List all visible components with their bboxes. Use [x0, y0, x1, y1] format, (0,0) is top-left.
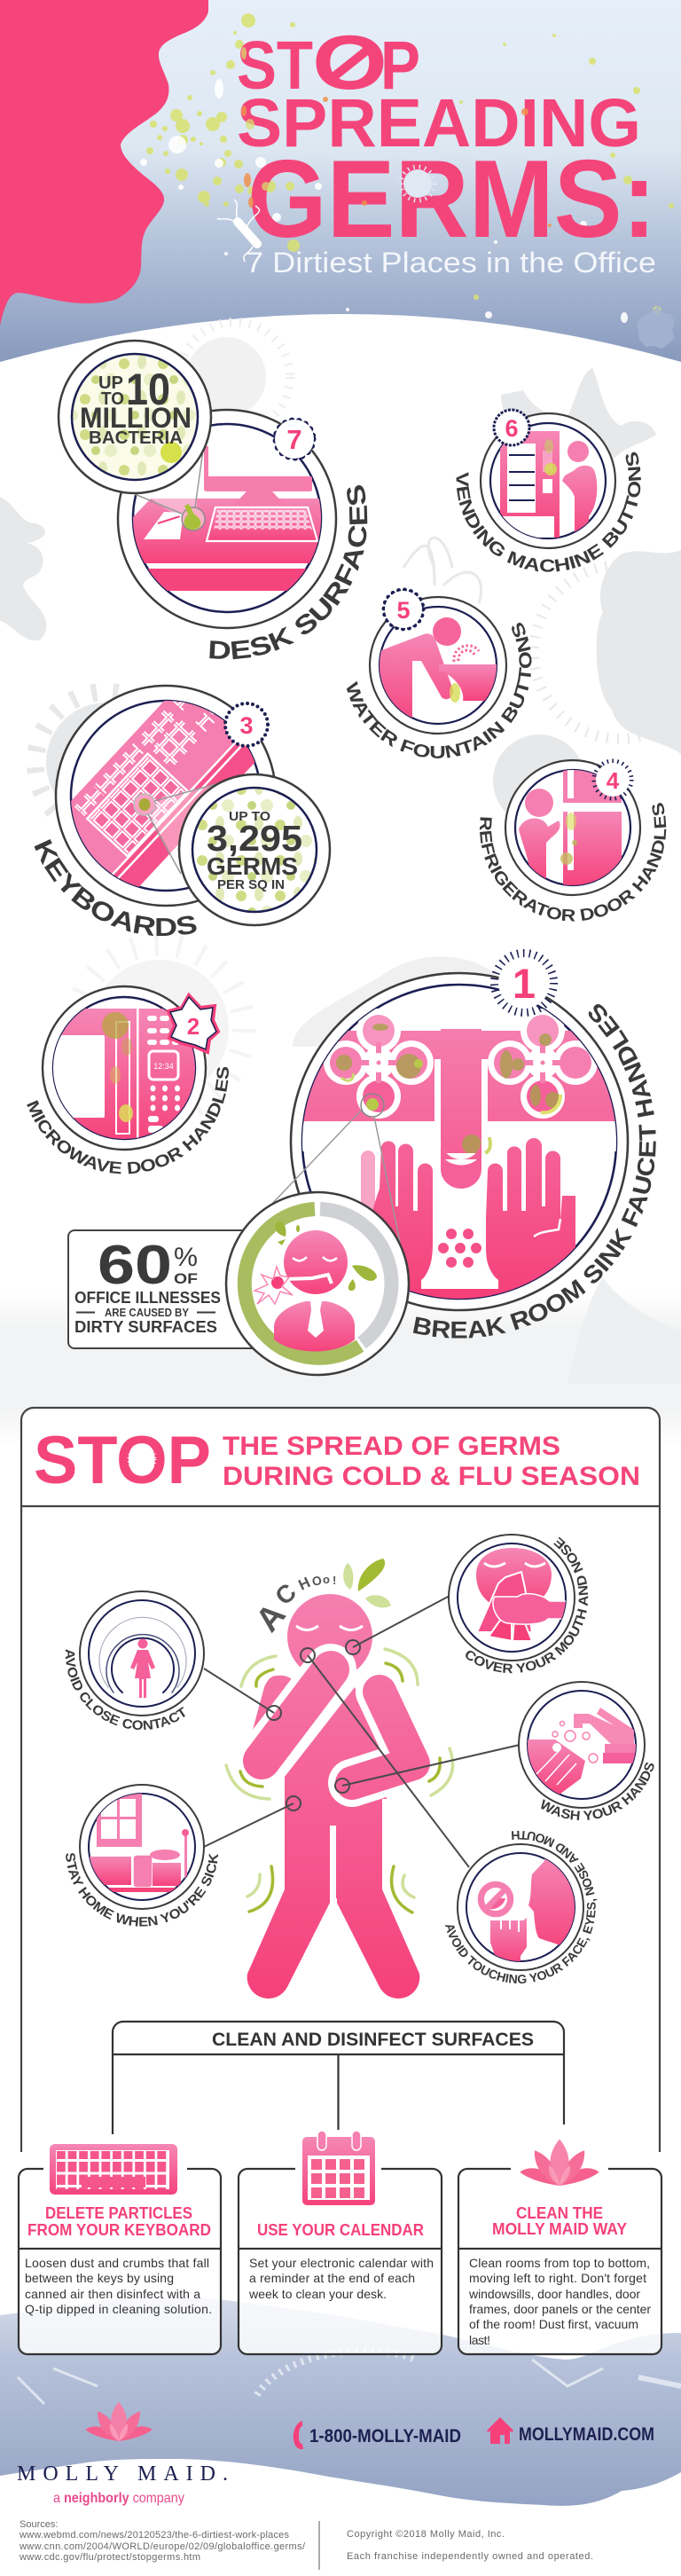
green drops — [352, 1265, 377, 1281]
eyes — [296, 1626, 363, 1630]
clean and disinfect bracket: CLEAN AND DISINFECT SURFACES — [212, 2030, 534, 2050]
badge 3 — [225, 703, 268, 746]
card: delete particles from your keyboard: Loosen dust and crumbs that fall — [25, 2256, 209, 2270]
bottom band and wrist — [410, 1289, 514, 1299]
icon: keyboard — [50, 2144, 177, 2195]
callout: 10 million bacteria: TO — [101, 389, 124, 409]
sources — [19, 2519, 306, 2563]
ring chart 60/40 — [245, 1209, 391, 1358]
icon: calendar — [302, 2131, 375, 2205]
sources: www.cnn.com/2004/WORLD/europe/02/09/globaloffice.germs/ — [19, 2541, 306, 2552]
title line: STOP: O — [312, 20, 387, 106]
sick face — [284, 1230, 348, 1294]
badge 7 — [275, 420, 314, 459]
card: clean the molly maid way: windowsills, door handles, door — [468, 2287, 640, 2301]
tip: avoid close contact: AVOID CLOSE CONTACT — [66, 1649, 185, 1730]
card: clean the molly maid way: MOLLY MAID WAY — [492, 2220, 627, 2238]
label: BREAK ROOM SINK FAUCET HANDLES — [413, 1004, 656, 1338]
bacterium — [217, 200, 260, 262]
stat box: 60 percent: ARE CAUSED BY — [105, 1307, 190, 1319]
card: clean the molly maid way: Clean rooms from top to bottom, — [469, 2256, 650, 2270]
stat box: 60 percent: OF — [174, 1270, 198, 1287]
tip: wash your hands: WASH YOUR HANDS — [541, 1762, 654, 1820]
callout: 3,295 germs: PER SQ IN — [217, 877, 285, 892]
drain holes — [438, 1229, 481, 1268]
panel heading: STOP — [34, 1423, 211, 1498]
card: use your calendar: Set your electronic calendar with — [249, 2256, 434, 2270]
badge 6: 6 — [505, 415, 519, 442]
title line: STOP: ST — [237, 27, 313, 104]
tip: cover your mouth and nose: COVER YOUR MOUTH AND NOSE — [466, 1536, 589, 1673]
pale background germs — [0, 322, 681, 1446]
stat box: 60 percent: OFFICE ILLNESSES — [74, 1289, 221, 1307]
card: use your calendar: USE YOUR CALENDAR — [257, 2221, 424, 2239]
title line: STOP: P — [380, 27, 420, 104]
copyright: Each franchise independently owned and operated. — [347, 2551, 593, 2562]
stat box: 60 percent — [68, 1230, 272, 1348]
wave germ decoration — [18, 2351, 681, 2404]
footer logo: lotus — [85, 2402, 153, 2441]
card: clean the molly maid way: frames, door panels or the center — [469, 2302, 651, 2316]
item 7: desk surfaces — [57, 339, 367, 660]
badge 2: 2 — [187, 1013, 200, 1040]
bottom wave background — [0, 2297, 681, 2506]
section: stop the spread panel — [21, 1408, 660, 2152]
callout: 10 million bacteria: MILLION — [80, 402, 192, 434]
card: delete particles from your keyboard: FROM YOUR KEYBOARD — [27, 2221, 211, 2239]
icon: house — [487, 2417, 513, 2444]
stat box: 60 percent: % — [174, 1243, 198, 1272]
footer tagline: a neighborly company — [53, 2491, 184, 2506]
faucet handles — [324, 1009, 598, 1119]
badge 2 — [168, 995, 218, 1052]
sneeze particles — [140, 13, 675, 349]
card: use your calendar: week to clean your desk. — [248, 2287, 387, 2301]
sneeze text: A — [249, 1597, 294, 1639]
sneeze text: C — [270, 1578, 301, 1610]
phone number: 1-800-MOLLY-MAID — [309, 2426, 461, 2446]
card: clean the molly maid way: CLEAN THE — [516, 2204, 603, 2222]
copyright: Copyright ©2018 Molly Maid, Inc. — [347, 2529, 505, 2540]
card: use your calendar: a reminder at the end of each — [249, 2271, 415, 2285]
torso — [285, 1687, 387, 1898]
badge 5 — [384, 590, 423, 629]
label: WATER FOUNTAIN BUTTONS — [346, 623, 532, 758]
badge 1: 1 — [513, 960, 536, 1007]
desk scene — [133, 446, 323, 591]
card: clean the molly maid way: last! — [469, 2333, 490, 2347]
item 6: vending machine buttons — [456, 408, 641, 572]
card: delete particles from your keyboard: canned air then disinfect with a — [25, 2287, 200, 2301]
tip: stay home when sick — [66, 1784, 218, 1927]
shoulders and tie — [274, 1301, 355, 1352]
label: REFRIGERATOR DOOR HANDLES — [479, 803, 667, 922]
white wave under header — [0, 314, 681, 1419]
badge 1 — [496, 954, 552, 1011]
tip: avoid touching face: AVOID TOUCHING YOUR FACE, EYES, NOSE AND MOUTH — [445, 1831, 598, 1983]
label: KEYBOARDS — [34, 839, 197, 937]
card: clean the molly maid way: of the room! Dust first, vacuum — [469, 2317, 638, 2331]
stat box: 60 percent: DIRTY SURFACES — [74, 1318, 217, 1336]
card: clean the molly maid way — [458, 2140, 661, 2354]
sneeze text: ! — [333, 1574, 336, 1587]
title germ splats — [217, 47, 552, 262]
card: delete particles from your keyboard: Q-tip dipped in cleaning solution. — [25, 2302, 212, 2316]
stat box: 60 percent: 60 — [98, 1235, 172, 1296]
callout: 10 million bacteria: UP — [98, 373, 123, 393]
panel heading — [34, 1423, 640, 1498]
connector lines and nodes — [204, 1596, 520, 1867]
left shoulder behind arm — [253, 1676, 292, 1730]
item 4: refrigerator door handles — [479, 759, 667, 922]
keyboard illustration — [71, 701, 255, 887]
sneeze text: o — [323, 1573, 330, 1586]
label: MICROWAVE DOOR HANDLES — [27, 1066, 229, 1174]
card: delete particles from your keyboard: between the keys by using — [25, 2271, 174, 2285]
callout: 3,295 germs: UP TO — [229, 809, 270, 824]
legs — [247, 1889, 330, 1999]
footer logo wordmark: MOLLY MAID. — [17, 2462, 228, 2486]
badge 5: 5 — [396, 597, 411, 624]
icon: phone — [294, 2421, 303, 2449]
badge 7: 7 — [286, 424, 302, 455]
subtitle: 7 Dirtiest Places in the Office — [246, 247, 656, 279]
title line: GERMS: GERMS: — [247, 138, 656, 261]
other arm with white outline — [352, 1692, 413, 1783]
germs on faucet — [336, 1024, 561, 1154]
callout: 3,295 germs — [179, 774, 330, 925]
badge 4 — [595, 762, 630, 797]
clean and disinfect bracket — [113, 2022, 564, 2134]
card: delete particles from your keyboard — [19, 2144, 221, 2354]
callout: sick worker with ring — [226, 1192, 409, 1375]
sneeze text: O — [310, 1573, 323, 1589]
badge 4: 4 — [607, 767, 620, 794]
callout: 3,295 germs: GERMS — [207, 852, 298, 880]
card: delete particles from your keyboard: DELETE PARTICLES — [45, 2204, 192, 2222]
sources: Sources: — [20, 2519, 58, 2530]
sink scene — [301, 1009, 621, 1304]
callout: 10 million bacteria: 10 — [126, 365, 170, 414]
copyright — [347, 2529, 593, 2562]
title — [237, 20, 656, 279]
sneezing figure — [226, 1559, 453, 1999]
raised arm with white outline — [262, 1669, 331, 1761]
callout: 10 million bacteria — [59, 341, 211, 493]
circle frame — [118, 410, 336, 628]
panel heading: THE SPREAD OF GERMS — [223, 1432, 560, 1461]
basin crescent — [441, 1159, 481, 1189]
title line: STOP — [237, 20, 420, 106]
green sneeze drops — [358, 1559, 385, 1591]
badge 6 — [494, 410, 529, 445]
card: use your calendar — [239, 2131, 442, 2354]
label: DESK SURFACES — [209, 485, 367, 660]
tip: wash your hands — [518, 1681, 654, 1820]
head — [287, 1594, 372, 1679]
callout: 3,295 germs: 3,295 — [207, 818, 302, 859]
sources: www.webmd.com/news/20120523/the-6-dirtiest-work-places — [19, 2530, 289, 2541]
left hand — [361, 1141, 433, 1294]
tip: stay home when sick: STAY HOME WHEN YOU'RE SICK — [66, 1853, 218, 1927]
motion swooshes — [226, 1649, 453, 1912]
icon: lotus — [520, 2140, 599, 2186]
callout: 10 million bacteria: BACTERIA — [89, 428, 183, 448]
tip: avoid close contact — [66, 1590, 205, 1730]
item 3: keyboards — [34, 685, 332, 937]
callout leader lines — [135, 444, 204, 514]
right hand — [485, 1138, 575, 1304]
item 5: water fountain buttons — [346, 587, 532, 758]
badge 3: 3 — [239, 712, 254, 739]
card: clean the molly maid way: moving left to right. Don't forget — [469, 2271, 646, 2285]
item 2: microwave door handles — [27, 985, 229, 1174]
sneeze text: H — [296, 1574, 313, 1594]
title line: SPREADING: SPREADING — [237, 85, 641, 161]
panel heading: DURING COLD & FLU SEASON — [223, 1462, 640, 1491]
item 1: break room sink faucet handles — [271, 949, 656, 1338]
website: MOLLYMAID.COM — [519, 2424, 654, 2445]
pink head silhouette sneezing — [0, 0, 208, 326]
sources: www.cdc.gov/flu/protect/stopgerms.htm — [19, 2552, 200, 2563]
item 2: microwave door handles: 12:34 — [153, 1062, 174, 1071]
header sky background — [0, 0, 681, 373]
label: VENDING MACHINE BUTTONS — [456, 452, 641, 572]
